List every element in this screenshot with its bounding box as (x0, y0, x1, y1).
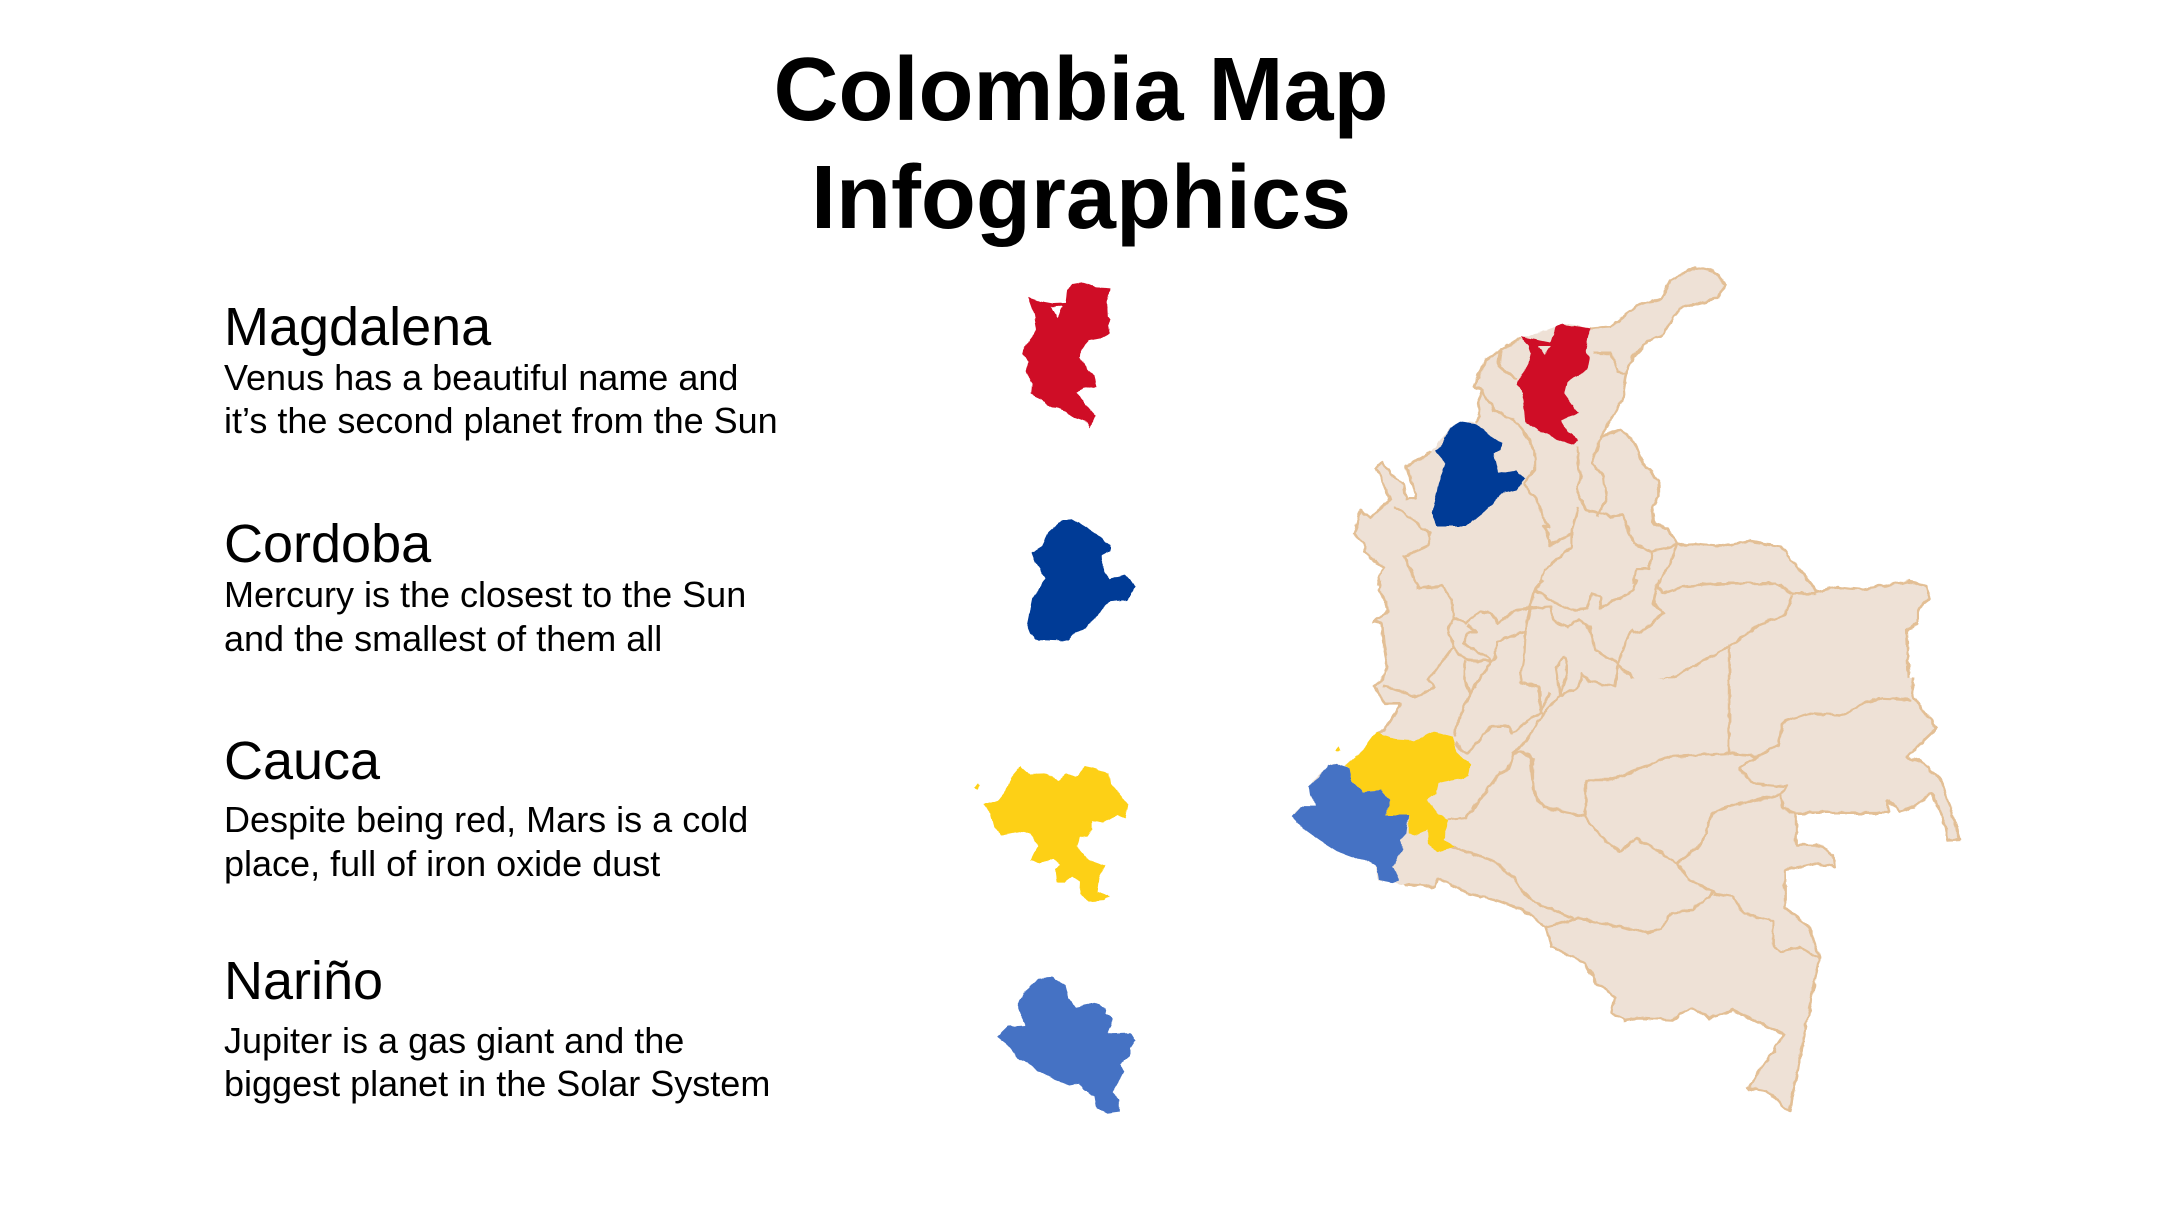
title: Colombia Map (773, 40, 1388, 140)
title: Infographics (811, 148, 1351, 248)
map: Colombia (1292, 267, 1960, 1112)
text block: Magdalena: Venus has a beautiful name and (224, 357, 738, 398)
text block: Nariño: Jupiter is a gas giant and the (224, 1020, 684, 1061)
text block: Cauca: place, full of iron oxide dust (224, 843, 660, 884)
icon: Nariño department (997, 977, 1135, 1113)
text block: Cordoba: and the smallest of them all (224, 618, 662, 659)
icon: Cauca department (974, 766, 1128, 902)
map: department land and borders (1292, 267, 1960, 1112)
map highlight: Cordoba (1432, 422, 1525, 526)
map highlight: Cauca (1335, 732, 1471, 852)
text block: Cauca: Despite being red, Mars is a cold (224, 799, 748, 840)
map highlight: Magdalena (1517, 324, 1590, 445)
icon: Magdalena department (1022, 282, 1110, 427)
text block: Magdalena: Magdalena (224, 297, 491, 357)
text block: Cauca (224, 731, 748, 884)
text block: Magdalena (224, 297, 778, 441)
title (773, 40, 1388, 248)
text block: Cordoba (224, 514, 746, 659)
text block: Nariño: Nariño (224, 951, 383, 1011)
icon: Cordoba department (1027, 519, 1136, 641)
map highlight: Nariño (1292, 763, 1409, 883)
text block: Cordoba: Mercury is the closest to the Sun (224, 574, 746, 615)
text block: Magdalena: it’s the second planet from the Sun (224, 400, 778, 441)
text block: Cauca: Cauca (224, 731, 380, 791)
text block: Nariño: biggest planet in the Solar System (224, 1063, 770, 1104)
text block: Cordoba: Cordoba (224, 514, 431, 574)
text block: Nariño (224, 951, 770, 1104)
